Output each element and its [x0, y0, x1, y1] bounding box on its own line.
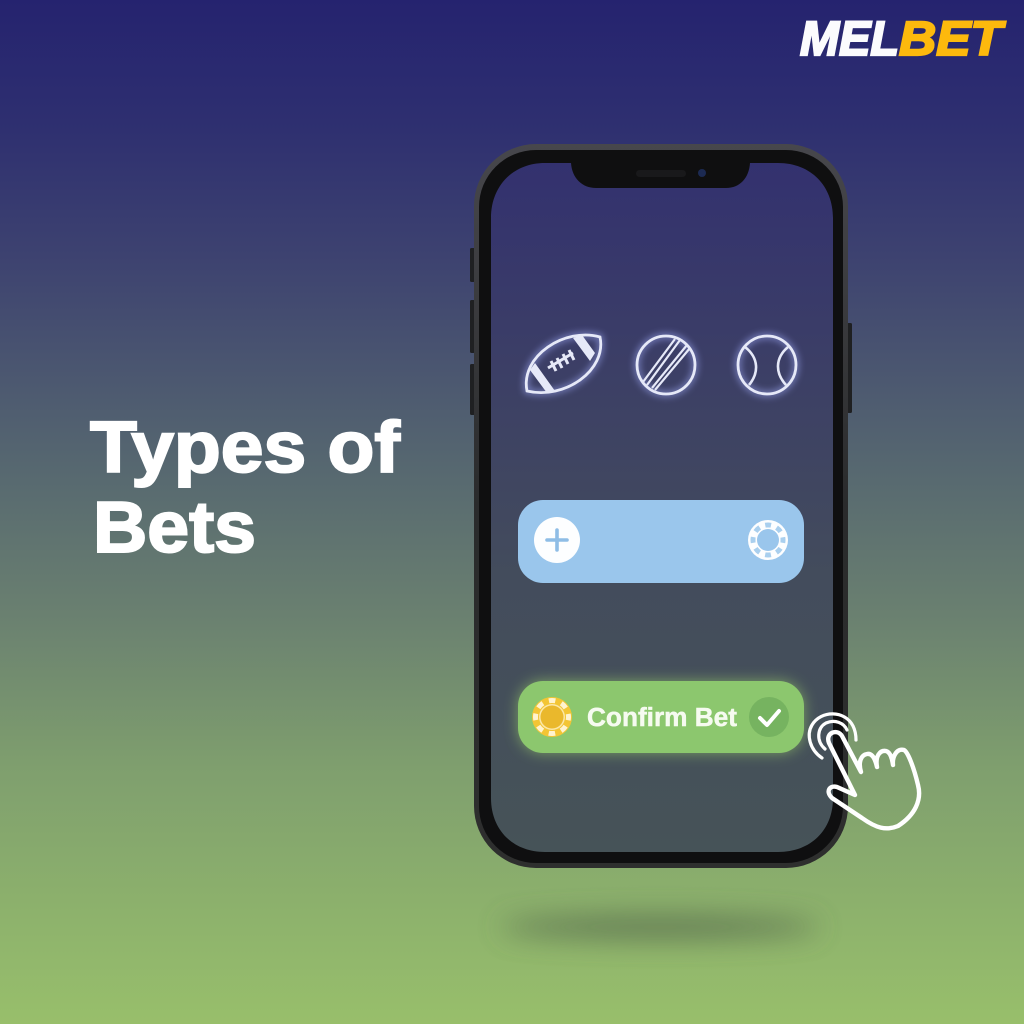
panel: add stake bar — [518, 500, 804, 583]
speaker — [636, 170, 686, 177]
camera — [698, 169, 706, 177]
label: Confirm Bet: Confirm Bet — [587, 704, 738, 732]
icon: gold chip — [532, 697, 572, 737]
logo: MELBET: MEL — [800, 13, 899, 66]
title: Types of — [90, 408, 401, 488]
icon: check — [749, 697, 789, 737]
phone shadow — [500, 916, 820, 938]
icon: white chip — [748, 520, 788, 560]
side buttons — [470, 248, 852, 415]
icon: tapping hand — [809, 714, 919, 828]
title — [90, 408, 401, 568]
title: Bets — [93, 488, 256, 568]
logo: MELBET: BET — [899, 13, 1006, 66]
phone body — [474, 144, 848, 868]
icon: american football — [526, 335, 601, 393]
icon: tennis ball — [738, 336, 796, 394]
panel: confirm bet button — [518, 681, 804, 753]
logo: MELBET — [800, 13, 1006, 66]
phone — [470, 144, 852, 868]
icon: cricket ball — [637, 336, 695, 394]
screen — [491, 163, 833, 852]
sport icons — [526, 335, 796, 394]
icon: plus — [534, 517, 580, 563]
